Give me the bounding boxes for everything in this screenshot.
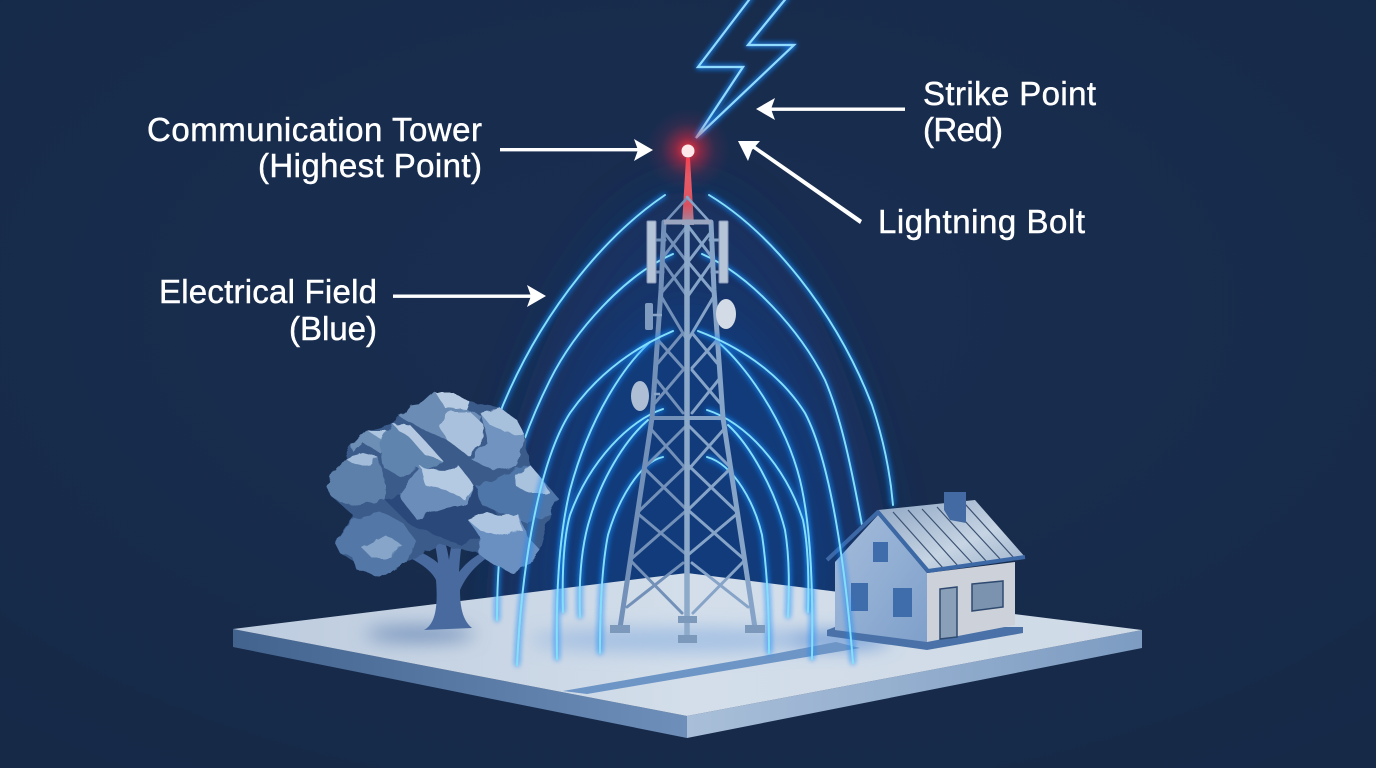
field lines behind objects	[488, 195, 893, 659]
label: strike point: Strike Point	[923, 75, 1096, 112]
tower footings	[610, 616, 765, 643]
windows and door	[851, 542, 1003, 639]
lightning bolt	[696, 0, 794, 138]
microwave dishes	[631, 299, 736, 411]
centre mast and top frame	[664, 222, 711, 640]
label: communication tower: Communication Tower	[147, 111, 482, 148]
road strip	[563, 642, 860, 694]
electrical field halo	[485, 190, 895, 640]
foliage	[327, 392, 558, 577]
platform	[233, 573, 1142, 738]
arrow: lightning bolt	[738, 141, 862, 224]
label: strike point: (Red)	[923, 111, 1003, 148]
label: lightning bolt: Lightning Bolt	[878, 203, 1085, 240]
label: strike point	[923, 75, 1096, 148]
tree	[327, 392, 558, 630]
front wall	[927, 562, 1015, 642]
house base	[827, 627, 1023, 650]
strike point	[646, 108, 730, 192]
label: electrical field: (Blue)	[289, 310, 377, 347]
arrow: electrical field	[393, 285, 546, 307]
antenna panels	[647, 221, 728, 283]
gable wall	[835, 515, 927, 642]
trunk	[395, 512, 494, 630]
label: electrical field	[159, 273, 377, 347]
roof	[878, 500, 1025, 570]
arrow: communication tower	[500, 139, 653, 161]
tower lattice right half	[687, 197, 755, 628]
label: communication tower	[147, 111, 482, 184]
communication tower	[610, 158, 765, 643]
chimney	[944, 492, 966, 523]
tower lattice left half	[620, 197, 688, 628]
antenna mast	[682, 158, 694, 225]
platform shadows and glow	[365, 627, 890, 652]
house	[827, 492, 1025, 650]
arrow: strike point	[756, 98, 905, 120]
roof seams	[893, 504, 1014, 568]
label: electrical field: Electrical Field	[159, 273, 377, 310]
label: communication tower: (Highest Point)	[258, 147, 482, 184]
field lines in front of tree and house	[517, 331, 853, 665]
roof trim	[827, 512, 1025, 571]
